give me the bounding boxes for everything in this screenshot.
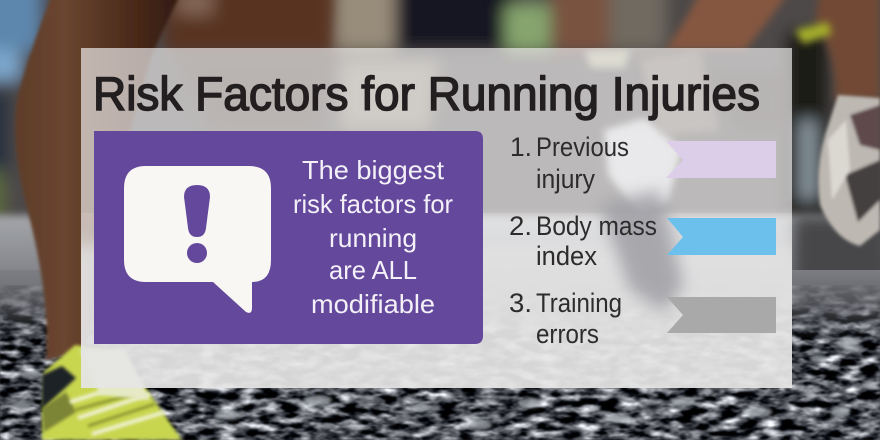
panel: purple callout — [94, 131, 483, 344]
ribbon: lilac — [666, 141, 776, 178]
risk factor 3: training errors — [509, 288, 776, 349]
ribbon: blue — [667, 218, 776, 255]
risk factor 2: body mass index: Body mass — [536, 211, 657, 241]
callout text — [293, 155, 453, 319]
risk factor 2: body mass index — [509, 211, 776, 271]
risk factor 1: previous injury: 1. — [510, 132, 532, 162]
callout text: modifiable — [311, 289, 435, 319]
risk factor 1: previous injury: injury — [536, 164, 595, 194]
title: Risk Factors for Running Injuries — [93, 67, 760, 120]
callout text: are ALL — [329, 255, 417, 285]
risk factor 1: previous injury: Previous — [536, 132, 629, 162]
risk factor 2: body mass index: 2. — [509, 211, 532, 241]
yellow running shoe — [42, 345, 182, 440]
risk factor 3: training errors: 3. — [509, 288, 532, 318]
callout text: running — [329, 223, 417, 253]
risk factor 1: previous injury — [510, 132, 776, 194]
callout text: risk factors for — [293, 189, 453, 219]
translucent white panel — [81, 48, 792, 388]
risk factor 3: training errors: errors — [536, 319, 599, 349]
icon: speech bubble with exclamation mark — [124, 166, 271, 313]
left leg — [15, 0, 180, 360]
callout text: The biggest — [302, 155, 445, 185]
ribbon: gray — [667, 297, 776, 333]
risk factor 3: training errors: Training — [536, 288, 622, 318]
risk factor 2: body mass index: index — [536, 241, 597, 271]
right runner's shoe — [818, 95, 880, 246]
